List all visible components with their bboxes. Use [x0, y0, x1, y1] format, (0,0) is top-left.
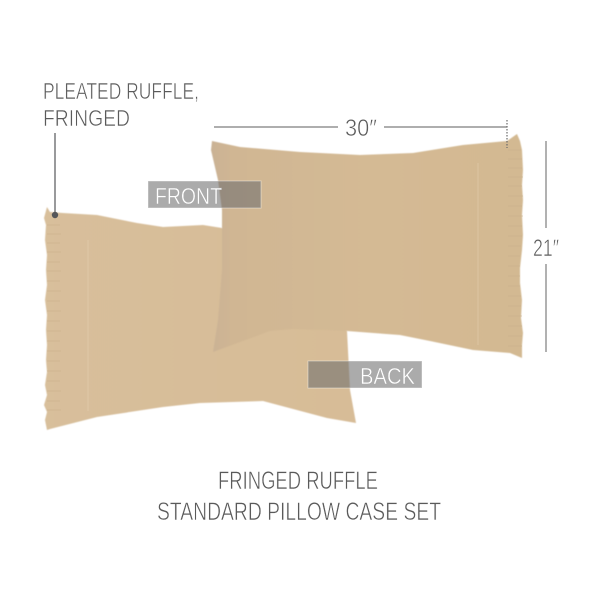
callout: pleated ruffle, fringed: FRINGED: [43, 105, 130, 131]
callout: pleated ruffle, fringed: PLEATED RUFFLE,: [43, 78, 199, 104]
label: front: FRONT: [155, 183, 222, 209]
label: back: BACK: [360, 363, 416, 389]
pleat seam: [477, 163, 479, 345]
back pillow case: [44, 207, 356, 430]
pleat seam: [87, 240, 89, 411]
label: front: [148, 181, 261, 209]
front pillow case: [211, 134, 523, 358]
title: FRINGED RUFFLE: [218, 467, 378, 495]
dimension: height 21 inches: 21″: [533, 235, 559, 262]
label: back: [308, 361, 422, 389]
callout: pleated ruffle, fringed: [43, 78, 199, 218]
title: [157, 467, 441, 526]
title: STANDARD PILLOW CASE SET: [157, 498, 441, 526]
dimension: width 30 inches: 30″: [345, 115, 377, 142]
left fringe: [47, 225, 61, 410]
right fringe: [508, 150, 523, 346]
